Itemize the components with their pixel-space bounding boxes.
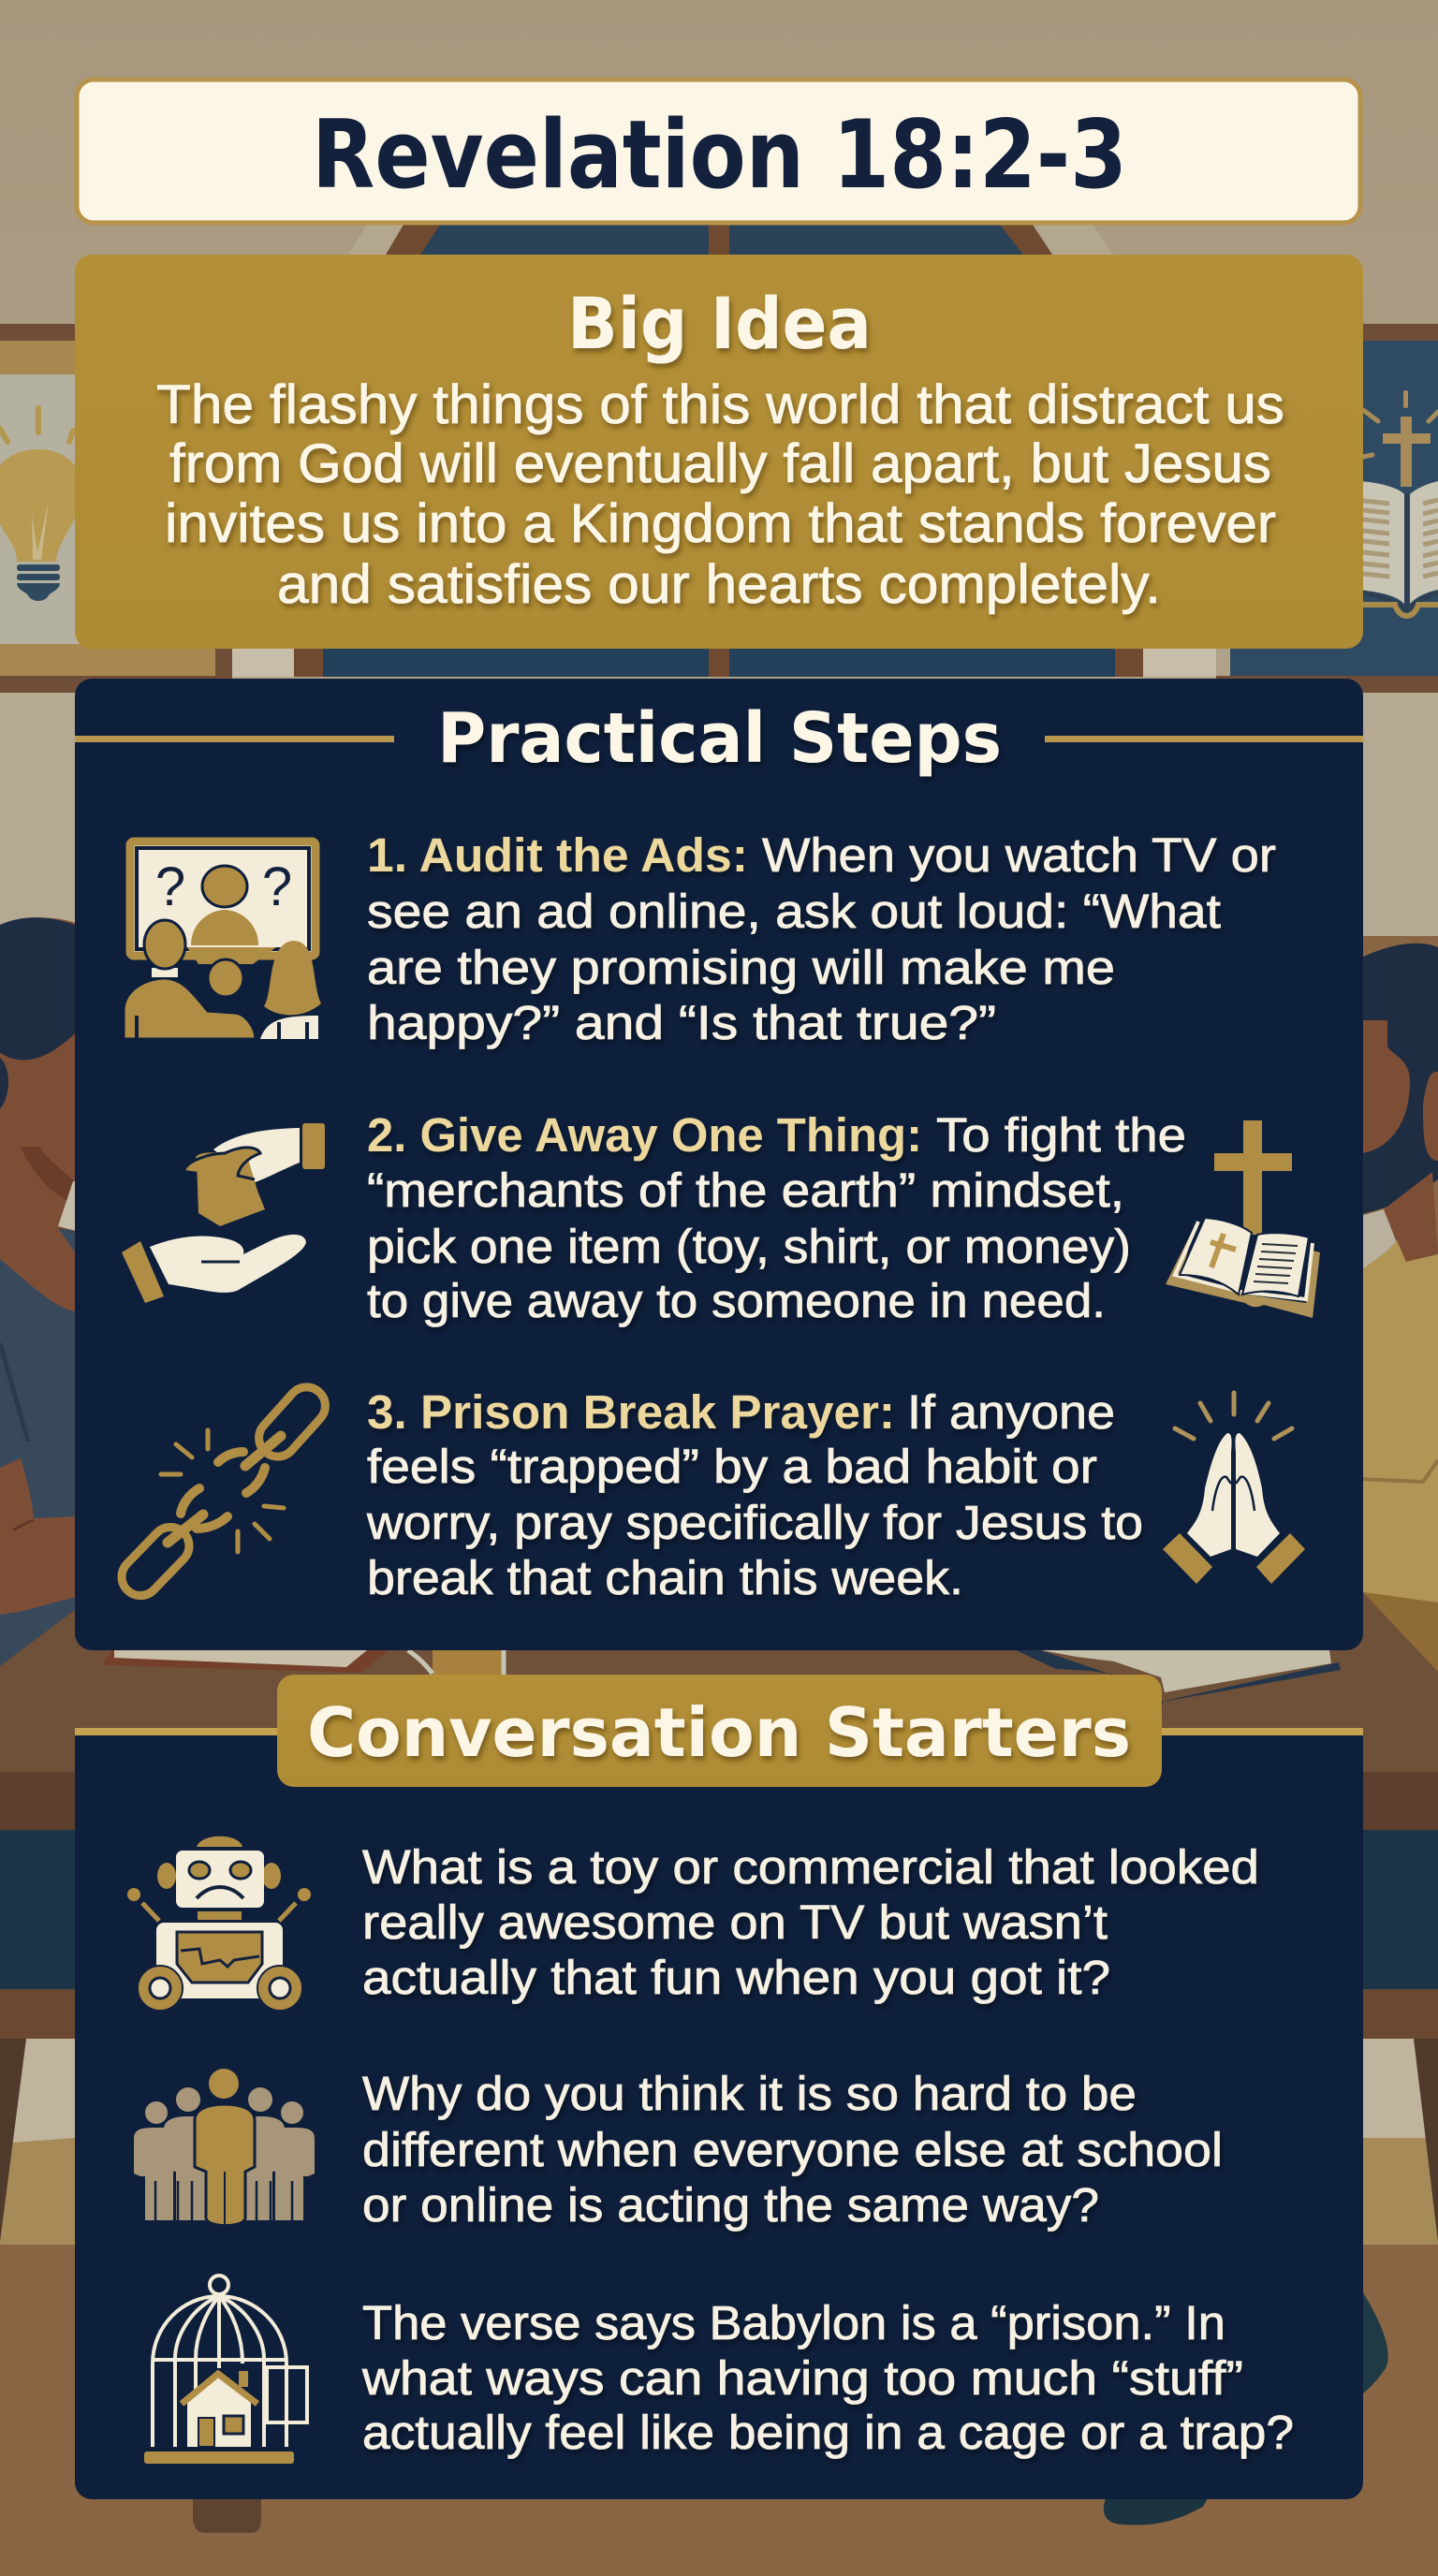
wall poster: bible and cross bbox=[1216, 324, 1438, 693]
open book on table right bbox=[1016, 1650, 1341, 1705]
question 2 text: different when everyone else at school bbox=[362, 2123, 1223, 2176]
step 3 text: If anyone bbox=[907, 1385, 1115, 1439]
book on table left bbox=[101, 1650, 389, 1673]
heading pill: conversation starters bbox=[277, 1675, 1162, 1787]
icon: one person standing out in crowd bbox=[134, 2069, 315, 2226]
step 2 text: “merchants of the earth” mindset, bbox=[367, 1164, 1124, 1217]
step 1 text: When you watch TV or bbox=[762, 828, 1276, 882]
big idea heading: Big Idea bbox=[567, 282, 872, 365]
big idea text bbox=[156, 374, 1284, 615]
step 1 text: see an ad online, ask out loud: “What bbox=[367, 885, 1221, 938]
step 2 text: To fight the bbox=[936, 1108, 1186, 1162]
big idea text: and satisfies our hearts completely. bbox=[277, 554, 1161, 615]
question 3 text: actually feel like being in a cage or a trap? bbox=[362, 2406, 1294, 2459]
question 2 text: or online is acting the same way? bbox=[362, 2178, 1099, 2232]
wall poster: light bulb bbox=[0, 324, 243, 693]
icon: giving hands bbox=[122, 1123, 325, 1303]
step 3 text: worry, pray specifically for Jesus to bbox=[366, 1496, 1143, 1549]
big idea text: The flashy things of this world that distract us bbox=[156, 374, 1284, 435]
step 3 text bbox=[366, 1385, 1143, 1604]
question 3 text: what ways can having too much “stuff” bbox=[361, 2351, 1243, 2405]
step 2 text bbox=[367, 1108, 1186, 1327]
step 1 text: happy?” and “Is that true?” bbox=[367, 996, 996, 1049]
panel: practical steps bbox=[75, 679, 1363, 1650]
step 3 text: 3. Prison Break Prayer: bbox=[367, 1385, 895, 1439]
big idea text: from God will eventually fall apart, but Jesus bbox=[169, 433, 1271, 494]
question 1 text: actually that fun when you got it? bbox=[362, 1951, 1110, 2004]
question 2 text: Why do you think it is so hard to be bbox=[362, 2067, 1137, 2120]
icon: sad broken robot bbox=[127, 1837, 311, 2011]
shoe bbox=[1104, 2490, 1212, 2525]
icon: family watching tv: ? bbox=[262, 856, 292, 917]
table leg bbox=[193, 2490, 261, 2533]
mug on table bbox=[408, 1650, 504, 1676]
title text: Revelation 18:2-3 bbox=[312, 99, 1127, 210]
step 1 text bbox=[367, 828, 1276, 1049]
question 2 text bbox=[362, 2067, 1223, 2232]
panel: big idea bbox=[75, 255, 1363, 649]
panel: conversation starters bbox=[75, 1675, 1363, 2499]
icon: house inside bird cage bbox=[144, 2276, 307, 2464]
title banner bbox=[77, 80, 1360, 223]
person left bbox=[0, 917, 84, 1666]
icon: family watching tv: ? bbox=[155, 856, 185, 917]
step 3 text: feels “trapped” by a bad habit or bbox=[367, 1440, 1097, 1493]
icon: family watching tv bbox=[124, 842, 321, 1039]
step 2 text: 2. Give Away One Thing: bbox=[367, 1108, 922, 1162]
icon: broken chain bbox=[114, 1380, 333, 1603]
question 1 text: What is a toy or commercial that looked bbox=[362, 1840, 1259, 1894]
icon: cross and open bible bbox=[1166, 1120, 1320, 1318]
question 1 text bbox=[362, 1840, 1259, 2004]
floor bbox=[0, 2245, 1438, 2576]
step 3 text: break that chain this week. bbox=[367, 1551, 963, 1604]
heading pill: conversation starters: Conversation Starters bbox=[307, 1693, 1131, 1772]
icon: praying hands bbox=[1163, 1393, 1305, 1584]
step 1 text: are they promising will make me bbox=[367, 941, 1115, 994]
step 1 text: 1. Audit the Ads: bbox=[367, 828, 748, 882]
person right bbox=[1357, 944, 1438, 1676]
question 3 text bbox=[361, 2296, 1294, 2459]
heading: practical steps bbox=[75, 698, 1363, 779]
big idea text: invites us into a Kingdom that stands forever bbox=[165, 493, 1276, 554]
table with books and mug bbox=[0, 1591, 1438, 2245]
heading: practical steps: Practical Steps bbox=[437, 698, 1002, 779]
step 2 text: pick one item (toy, shirt, or money) bbox=[367, 1220, 1131, 1273]
step 2 text: to give away to someone in need. bbox=[367, 1274, 1106, 1327]
question 3 text: The verse says Babylon is a “prison.” In bbox=[362, 2296, 1225, 2349]
window bbox=[232, 225, 1216, 677]
question 1 text: really awesome on TV but wasn’t bbox=[362, 1895, 1108, 1949]
right leg bbox=[1357, 2284, 1388, 2396]
